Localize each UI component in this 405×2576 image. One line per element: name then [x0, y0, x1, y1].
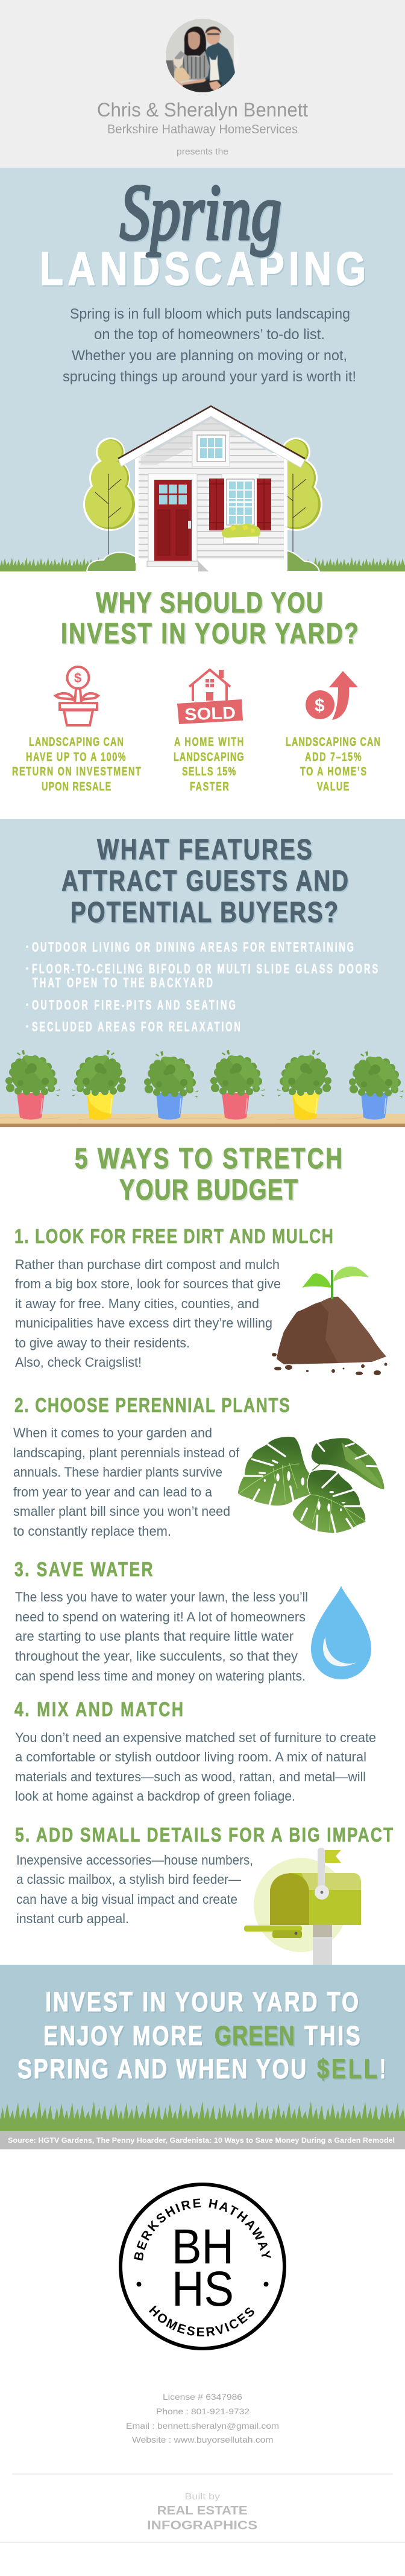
- brokerage: Berkshire Hathaway HomeServices: [107, 122, 298, 136]
- stat: sells faster: A HOME WITH: [174, 735, 243, 749]
- source bar: Source: HGTV Gardens, The Penny Hoarder, Gardenista: 10 Ways to Save Money During a Garden Remodel: [8, 2137, 395, 2145]
- icon: money plant: [55, 667, 98, 725]
- tip 5: can have a big visual impact and create: [16, 1892, 237, 1907]
- heading: INVEST IN YOUR YARD?: [61, 618, 359, 650]
- bush left: [87, 552, 137, 571]
- tip 2: [13, 1395, 384, 1539]
- tip 4: 4. MIX AND MATCH: [14, 1699, 183, 1721]
- front step: [136, 561, 287, 571]
- icon: water drop: [311, 1586, 371, 1679]
- contact details: Phone : 801-921-9732: [156, 2406, 250, 2416]
- tip 5: a classic mailbox, a stylish bird feeder—: [16, 1872, 241, 1887]
- tip 5: Inexpensive accessories—house numbers,: [16, 1852, 253, 1868]
- closing message: $ELL: [317, 2053, 377, 2084]
- source bar: [0, 2131, 405, 2149]
- heading: POTENTIAL BUYERS?: [71, 897, 338, 929]
- house walls: [137, 455, 286, 561]
- stat: home value: TO A HOME’S: [300, 765, 366, 778]
- window with shutters: [209, 474, 271, 530]
- grass strip: [0, 2101, 405, 2131]
- stat: 100% return: UPON RESALE: [42, 780, 111, 793]
- agent name: Chris & Sheralyn Bennett: [97, 99, 308, 121]
- gable window: [192, 431, 230, 466]
- feature list: FLOOR-TO-CEILING BIFOLD OR MULTI SLIDE GLASS DOORS: [32, 961, 378, 976]
- potted plant: pink: [5, 1050, 60, 1120]
- tip 4: [14, 1699, 376, 1804]
- closing message: INVEST IN YOUR YARD TO: [45, 1986, 359, 2017]
- bush right: [286, 550, 319, 571]
- heading: WHAT FEATURES: [97, 834, 312, 866]
- feature list: [26, 940, 378, 1034]
- shelf: [0, 1114, 405, 1127]
- feature list: OUTDOOR FIRE-PITS AND SEATING: [32, 997, 236, 1013]
- tip 2: landscaping, plant perennials instead of: [13, 1445, 240, 1460]
- tip 2: smaller plant bill since you won’t need: [13, 1504, 230, 1519]
- title: spring: Spring: [120, 168, 281, 256]
- stat: 100% return: HAVE UP TO A 100%: [26, 750, 126, 764]
- logo: Berkshire Hathaway HomeServices: BERKSHIRE HATHAWAY: [134, 2199, 271, 2260]
- roof: [118, 406, 305, 468]
- potted plant: blue: [143, 1051, 198, 1120]
- potted plant: blue: [348, 1051, 403, 1120]
- house: [118, 406, 305, 571]
- agent photo: [165, 18, 240, 93]
- tip 1: from a big box store, look for sources that give: [15, 1276, 281, 1291]
- tip 3: 3. SAVE WATER: [14, 1559, 153, 1581]
- tip 3: are starting to use plants that require little water: [15, 1629, 294, 1644]
- tip 1: Also, check Craigslist!: [15, 1355, 142, 1370]
- icon: dirt with sprout: [272, 1267, 387, 1375]
- title: landscaping: LANDSCAPING: [40, 243, 366, 295]
- panel: features: [0, 819, 405, 1127]
- icon: value arrow: [306, 671, 358, 720]
- tip 2: to constantly replace them.: [13, 1524, 171, 1539]
- flower box: [222, 524, 260, 544]
- tip 1: it away for free. Many cities, counties, and: [15, 1296, 259, 1311]
- closing message: !: [380, 2053, 386, 2084]
- logo: Berkshire Hathaway HomeServices: HS: [172, 2262, 234, 2317]
- grass strip: [0, 557, 405, 571]
- panel: why invest: [0, 571, 405, 819]
- panel: five ways: [0, 1127, 405, 1965]
- tree left: [83, 437, 136, 558]
- heading: WHY SHOULD YOU: [96, 587, 323, 619]
- tip 4: You don’t need an expensive matched set of furniture to create: [15, 1730, 376, 1745]
- heading: [61, 834, 348, 929]
- tip 3: need to spend on watering it! A lot of homeowners: [15, 1609, 306, 1624]
- tip 2: from year to year and can lead to a: [13, 1484, 213, 1499]
- intro paragraph: Spring is in full bloom which puts landscaping: [70, 306, 350, 322]
- heading: YOUR BUDGET: [119, 1174, 298, 1206]
- heading: [75, 1143, 342, 1206]
- presents the: presents the: [177, 147, 228, 157]
- tree right: [269, 437, 322, 558]
- tip 2: annuals. These hardier plants survive: [13, 1465, 222, 1480]
- tip 3: The less you have to water your lawn, the less you’ll: [15, 1589, 308, 1604]
- tip 1: [14, 1226, 387, 1375]
- stat: 100% return: LANDSCAPING CAN: [29, 735, 124, 749]
- potted plant: pink: [210, 1050, 265, 1120]
- heading: ATTRACT GUESTS AND: [61, 865, 348, 897]
- closing message: SPRING AND WHEN YOU: [17, 2053, 306, 2084]
- heading: [61, 587, 359, 650]
- door: [148, 474, 197, 561]
- tip 4: look at home against a backdrop of green foliage.: [15, 1789, 295, 1804]
- built by credit: INFOGRAPHICS: [147, 2519, 257, 2532]
- panel: agent header: [0, 0, 405, 168]
- contact details: Email : bennett.sheralyn@gmail.com: [126, 2421, 279, 2431]
- tip 1: municipalities have excess dirt they’re willing: [15, 1315, 272, 1331]
- icon: money plant: $: [74, 670, 81, 685]
- built by credit: [147, 2492, 257, 2532]
- panel: hero: [0, 168, 405, 571]
- intro paragraph: on the top of homeowners’ to-do list.: [94, 326, 325, 343]
- stat: home value: ADD 7–15%: [305, 750, 362, 764]
- contact details: Website : www.buyorsellutah.com: [132, 2435, 274, 2444]
- icon: mailbox: [244, 1848, 361, 1965]
- icon: sold house: [177, 670, 243, 724]
- logo: Berkshire Hathaway HomeServices: BH: [172, 2219, 234, 2274]
- stat: 100% return: [12, 735, 141, 793]
- feature list: OUTDOOR LIVING OR DINING AREAS FOR ENTERTAINING: [32, 940, 354, 955]
- tip 2: When it comes to your garden and: [13, 1425, 212, 1440]
- feature list: SECLUDED AREAS FOR RELAXATION: [32, 1019, 240, 1034]
- intro paragraph: [63, 306, 356, 385]
- stat: home value: [286, 735, 380, 793]
- tip 5: 5. ADD SMALL DETAILS FOR A BIG IMPACT: [15, 1824, 393, 1846]
- icon: value arrow: $: [315, 696, 325, 716]
- intro paragraph: Whether you are planning on moving or not,: [72, 348, 347, 364]
- stat: sells faster: [174, 735, 244, 793]
- stat: home value: LANDSCAPING CAN: [286, 735, 380, 749]
- closing message: ENJOY MORE: [43, 2020, 202, 2051]
- tip 3: [14, 1559, 371, 1684]
- built by credit: REAL ESTATE: [157, 2504, 248, 2517]
- potted plant: yellow: [277, 1050, 332, 1120]
- intro paragraph: sprucing things up around your yard is worth it!: [63, 369, 356, 385]
- heading: 5 WAYS TO STRETCH: [75, 1143, 342, 1175]
- icon: sold house: SOLD: [184, 704, 236, 724]
- stat: 100% return: RETURN ON INVESTMENT: [12, 765, 141, 778]
- feature list: THAT OPEN TO THE BACKYARD: [33, 975, 213, 990]
- tip 3: throughout the year, like succulents, so that they: [15, 1649, 298, 1664]
- potted plant: yellow: [72, 1050, 127, 1120]
- tip 5: [15, 1824, 393, 1965]
- built by credit: Built by: [184, 2492, 221, 2502]
- stat: sells faster: FASTER: [190, 780, 229, 793]
- stat: sells faster: LANDSCAPING: [174, 750, 244, 764]
- closing message: [17, 1986, 386, 2084]
- tip 1: Rather than purchase dirt compost and mulch: [15, 1257, 280, 1272]
- tip 4: a comfortable or stylish outdoor living room. A mix of natural: [15, 1749, 366, 1764]
- tip 2: 2. CHOOSE PERENNIAL PLANTS: [14, 1395, 290, 1417]
- panel: call to action: [0, 1965, 405, 2131]
- closing message: THIS: [304, 2020, 360, 2051]
- closing message: GREEN: [215, 2020, 295, 2051]
- tip 1: 1. LOOK FOR FREE DIRT AND MULCH: [14, 1226, 333, 1248]
- icon: monstera leaves: [238, 1437, 384, 1533]
- tip 3: can spend less time and money on watering plants.: [15, 1668, 306, 1684]
- tip 4: materials and textures—such as wood, rattan, and metal—will: [15, 1769, 366, 1784]
- stat: home value: VALUE: [317, 780, 349, 793]
- tip 5: instant curb appeal.: [16, 1911, 129, 1926]
- stat: sells faster: SELLS 15%: [182, 765, 236, 778]
- logo: Berkshire Hathaway HomeServices: [119, 2183, 286, 2350]
- contact details: [126, 2392, 279, 2444]
- contact details: License # 6347986: [163, 2392, 242, 2402]
- logo: Berkshire Hathaway HomeServices: HOMESERVICES: [149, 2305, 254, 2336]
- tip 1: to give away to their residents.: [15, 1335, 190, 1350]
